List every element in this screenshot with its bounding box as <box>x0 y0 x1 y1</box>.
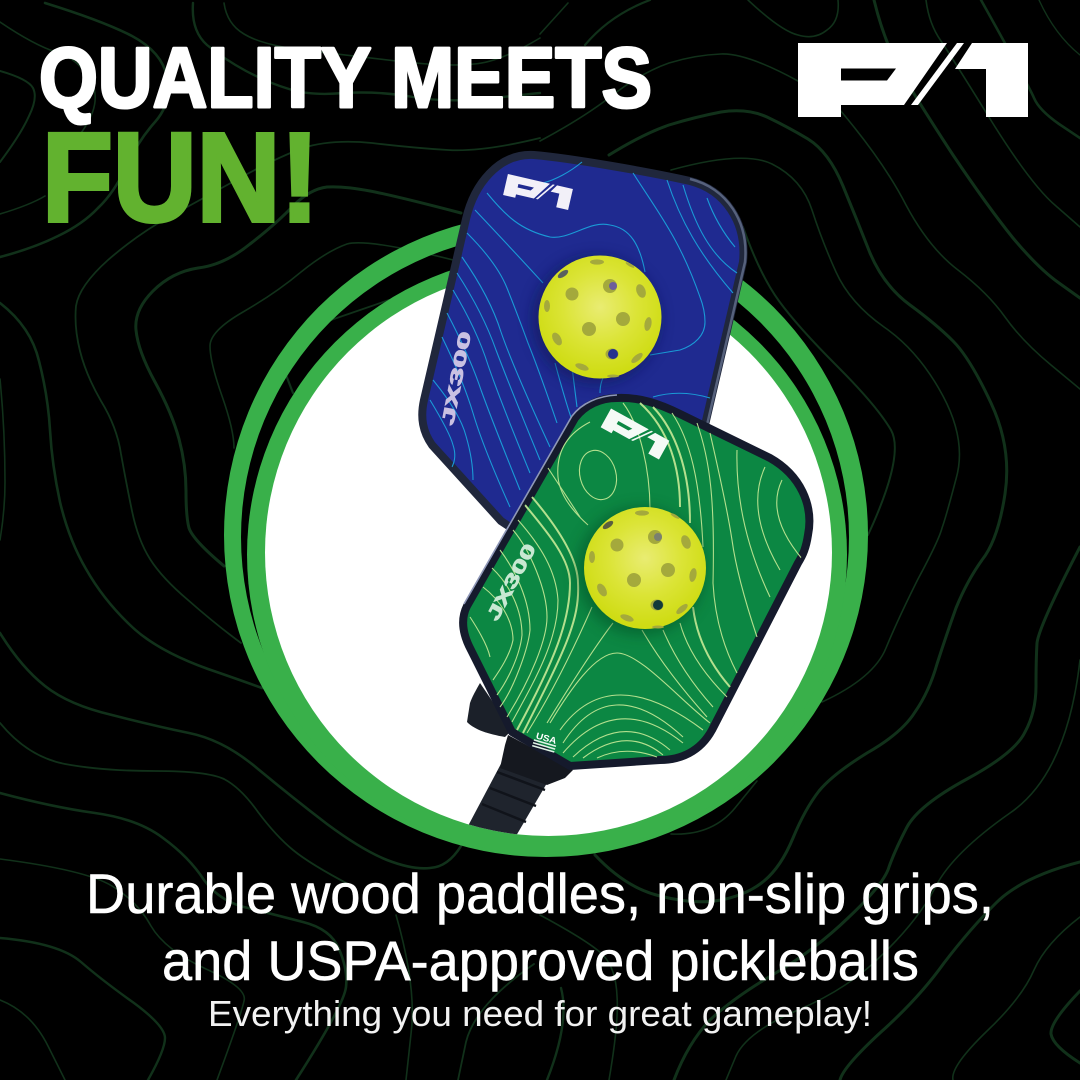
green paddle face <box>463 398 809 766</box>
green paddle contour lines <box>470 403 803 758</box>
blue paddle logo <box>503 174 573 210</box>
P1 logo <box>798 43 1028 117</box>
green paddle <box>463 395 809 766</box>
yellow pickleball on blue paddle <box>538 256 662 378</box>
blue paddle rim highlight <box>690 179 745 425</box>
green paddle rim highlight <box>464 395 617 604</box>
description line two: and USPA-approved pickleballs <box>162 929 919 992</box>
blue paddle <box>422 155 745 737</box>
blue paddle model label: JX300 <box>438 330 475 427</box>
grip wrap lines <box>482 772 545 822</box>
yellow pickleball on green paddle <box>584 507 706 629</box>
green rings and white circle <box>224 213 868 857</box>
collar <box>500 735 573 785</box>
shadow under blue paddle ball <box>532 256 660 384</box>
tagline: Everything you need for great gameplay! <box>208 993 872 1034</box>
green paddle model label: JX300 <box>483 540 540 624</box>
description line one: Durable wood paddles, non-slip grips, <box>86 862 994 925</box>
USA approval badge: USA <box>535 731 558 746</box>
green paddle handle <box>468 735 573 836</box>
USA approval badge <box>532 730 559 752</box>
shadow under green paddle ball <box>577 507 705 635</box>
grip <box>468 760 547 836</box>
title: quality meets: QUALITY MEETS <box>39 31 652 126</box>
green paddle logo <box>601 408 669 460</box>
title: fun: FUN! <box>42 107 319 248</box>
blue paddle handle <box>467 683 512 737</box>
blue paddle face <box>422 155 743 560</box>
blue paddle contour lines <box>430 162 737 507</box>
